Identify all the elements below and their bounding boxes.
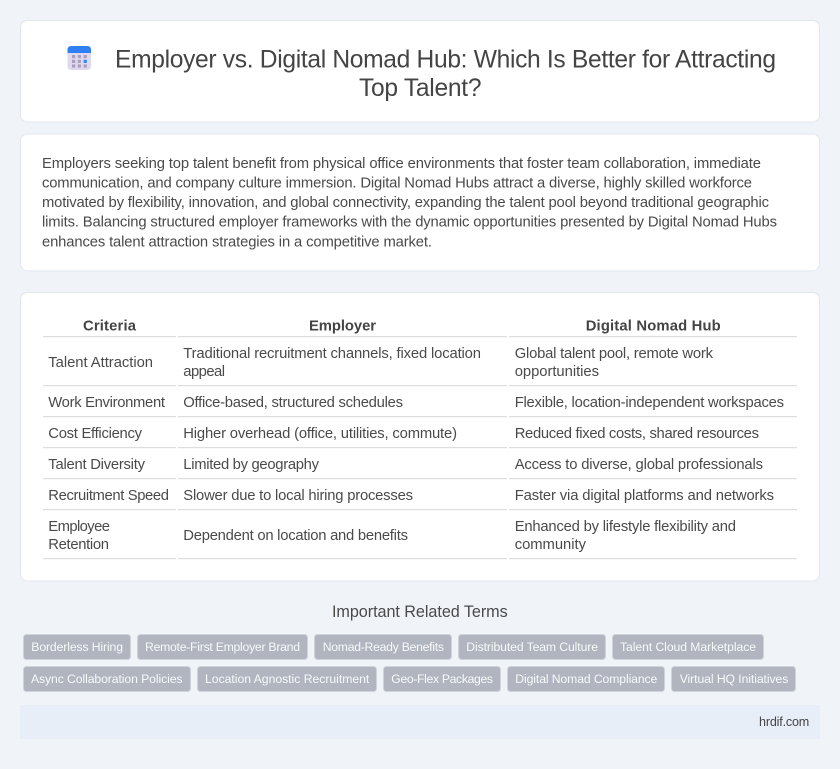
table row: talent diversity [43, 457, 797, 479]
table header row: Criteria [83, 319, 137, 335]
table row: talent diversity: Limited by geography [183, 457, 320, 473]
table row: talent diversity: Access to diverse, global professionals [515, 457, 763, 473]
title: Employer vs. Digital Nomad Hub: Which Is Better for Attracting [115, 46, 776, 74]
table row: recruitment speed: Slower due to local hiring processes [183, 488, 413, 504]
footer [20, 705, 820, 739]
table row: recruitment speed: Faster via digital platforms and networks [515, 488, 774, 504]
panel: title card [20, 20, 820, 122]
text block: introduction paragraph: Employers seeking top talent benefit from physical office environments that foster team collaboration, immediate [42, 156, 761, 172]
table row: cost efficiency: Higher overhead (office, utilities, commute) [183, 426, 457, 442]
table row: recruitment speed [43, 488, 797, 510]
panel: introduction [20, 134, 820, 271]
tags: related terms [24, 634, 796, 692]
tag: nomad-ready benefits: Nomad-Ready Benefits [323, 640, 444, 654]
tag: virtual hq initiatives: Virtual HQ Initiatives [680, 672, 788, 686]
tag: remote-first employer brand: Remote-First Employer Brand [145, 640, 300, 654]
table row: talent attraction: Global talent pool, remote work [515, 346, 714, 362]
text block: introduction paragraph: motivated by flexibility, innovation, and global connectivity, expanding the talent pool beyond traditional geographic [42, 195, 770, 211]
tag: distributed team culture: Distributed Team Culture [466, 640, 598, 654]
tag: borderless hiring [24, 634, 130, 660]
table header row: Employer [309, 319, 376, 335]
text block: introduction paragraph: enhances talent attraction strategies in a competitive market. [42, 234, 432, 250]
tag: talent cloud marketplace [612, 634, 764, 660]
tag: location agnostic recruitment [198, 666, 376, 692]
table row: work environment: Flexible, location-independent workspaces [515, 395, 784, 411]
tag: geo-flex packages: Geo-Flex Packages [391, 672, 493, 686]
title [115, 46, 776, 102]
table row: employee retention: Employee [48, 519, 110, 535]
title: Top Talent? [359, 75, 482, 102]
tag: digital nomad compliance: Digital Nomad Compliance [515, 672, 658, 686]
table row: employee retention [43, 519, 797, 559]
table row: work environment [43, 395, 797, 417]
table row: work environment: Office-based, structured schedules [183, 395, 403, 411]
tag: digital nomad compliance [508, 666, 664, 692]
table row: cost efficiency: Reduced fixed costs, shared resources [515, 426, 759, 442]
text block: introduction paragraph [42, 156, 777, 250]
table header row [43, 319, 797, 337]
table header row: Digital Nomad Hub [586, 319, 721, 335]
tag: distributed team culture [458, 634, 606, 660]
table row: talent attraction: appeal [183, 364, 225, 380]
table row: talent attraction: Traditional recruitment channels, fixed location [183, 346, 481, 362]
panel: comparison table [20, 292, 820, 581]
table row: employee retention: Dependent on location and benefits [183, 528, 408, 544]
footer: hrdif.com [759, 715, 809, 729]
table row: employee retention: community [515, 537, 587, 553]
table row: talent attraction [43, 346, 797, 386]
table row: talent attraction: Talent Attraction [48, 355, 153, 371]
tag: nomad-ready benefits [314, 634, 452, 660]
table row: employee retention: Enhanced by lifestyle flexibility and [515, 519, 736, 535]
text block: introduction paragraph: limits. Balancing structured employer frameworks with the dynamic opportunities presented by Digital Nomad Hubs [42, 215, 777, 231]
tag: remote-first employer brand [138, 634, 308, 660]
text block: introduction paragraph: communication, and company culture immersion. Digital Nomad Hubs attract a diverse, highly skilled workforce [42, 176, 752, 192]
tag: async collaboration policies [24, 666, 190, 692]
table row: work environment: Work Environment [48, 395, 165, 411]
tag: async collaboration policies: Async Collaboration Policies [31, 672, 182, 686]
tag: virtual hq initiatives [672, 666, 796, 692]
table row: cost efficiency: Cost Efficiency [48, 426, 143, 442]
tag: borderless hiring: Borderless Hiring [31, 640, 123, 654]
tag: talent cloud marketplace: Talent Cloud Marketplace [620, 640, 756, 654]
table row: cost efficiency [43, 426, 797, 448]
tag: geo-flex packages [384, 666, 500, 692]
table row: talent attraction: opportunities [515, 364, 599, 380]
heading: important related terms: Important Related Terms [332, 603, 508, 621]
tag: location agnostic recruitment: Location Agnostic Recruitment [205, 672, 370, 686]
table row: talent diversity: Talent Diversity [48, 457, 146, 473]
table row: recruitment speed: Recruitment Speed [48, 488, 169, 504]
icon: calendar [68, 46, 91, 70]
table row: employee retention: Retention [48, 537, 109, 553]
